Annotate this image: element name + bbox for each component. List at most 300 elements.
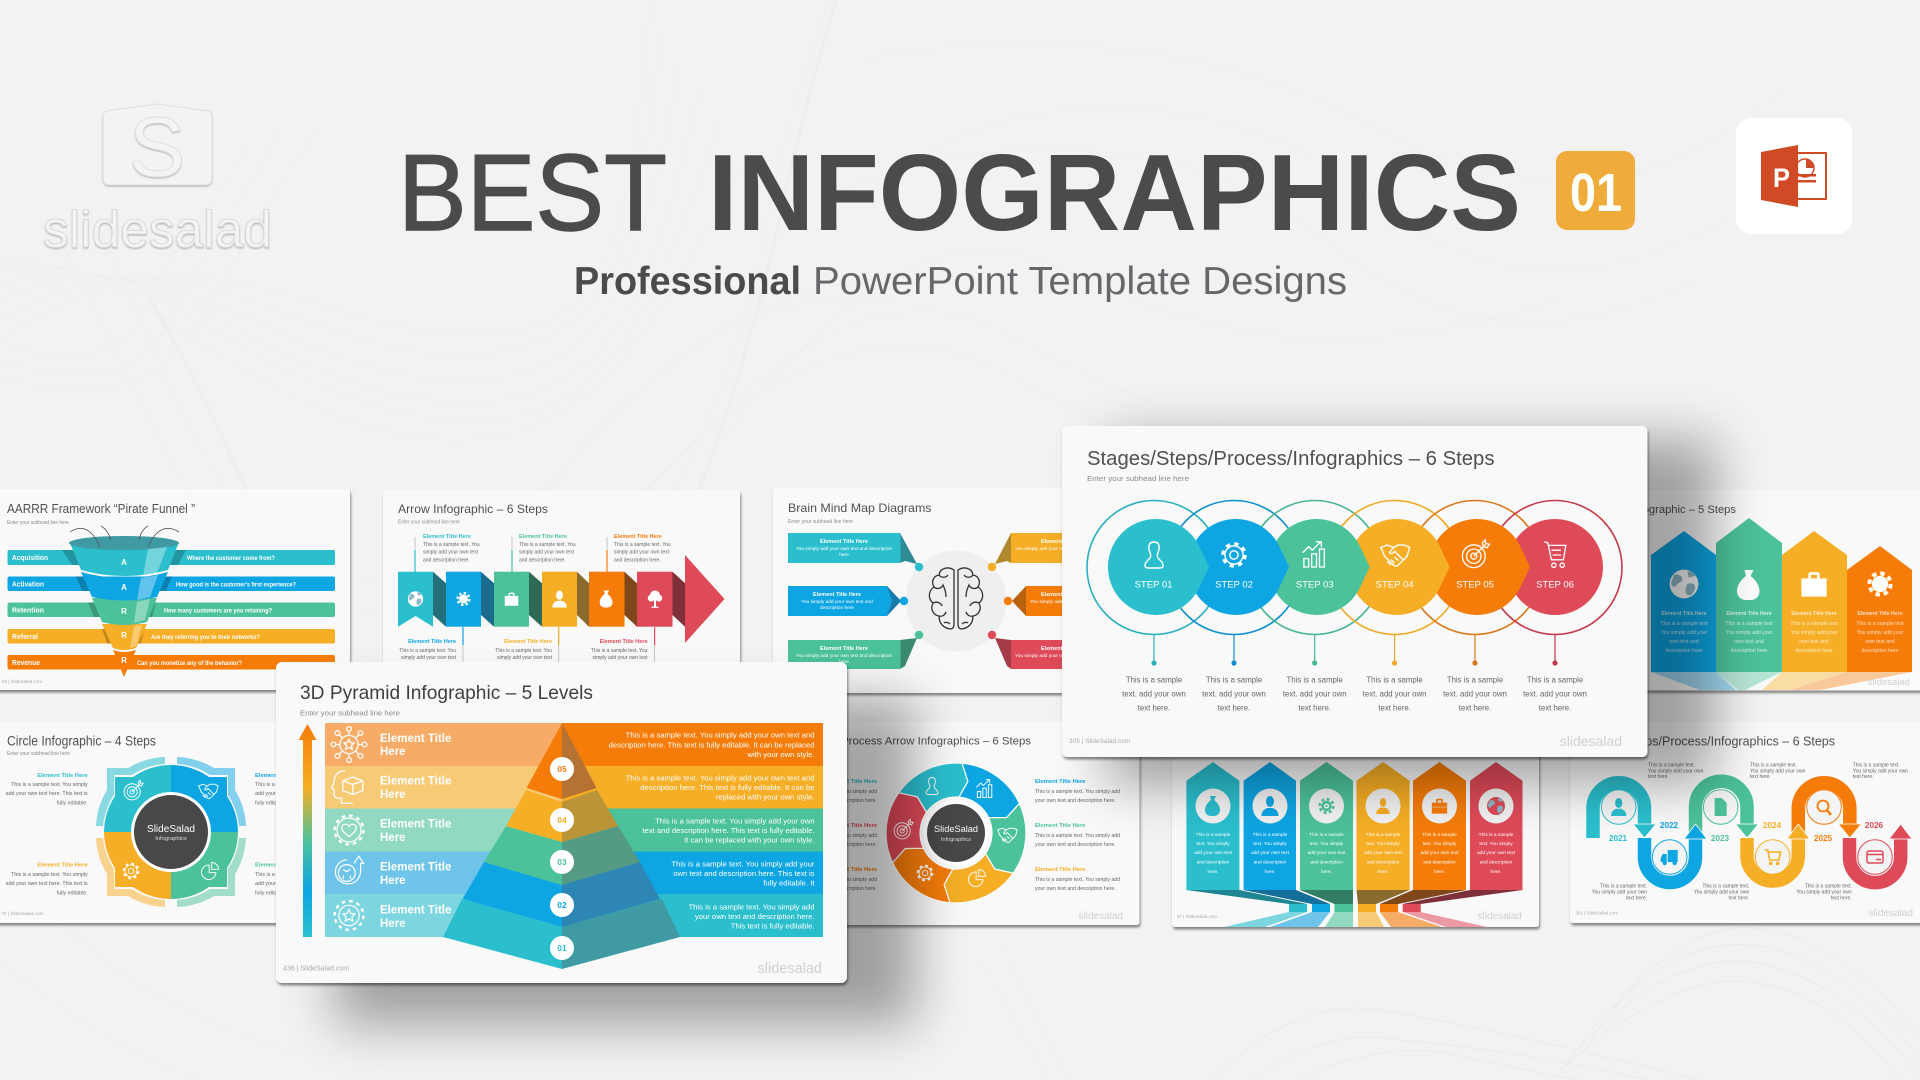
brain boxes: Element Title Here (820, 539, 868, 545)
subtitle: Professional (574, 260, 801, 303)
arrow columns: own text and (1865, 639, 1895, 645)
logo wordmark: slidesalad (43, 201, 272, 259)
timeline rings (1601, 790, 1892, 874)
brain boxes (788, 533, 1089, 669)
panel: banner columns: slidesalad (1478, 911, 1522, 922)
band descriptions: This is a sample text. You simply add (688, 902, 814, 911)
pyramid subhead: Enter your subhead line here (300, 708, 400, 718)
brain boxes: Element Title Here (813, 592, 861, 598)
timeline notes: This is a sample text. (1750, 762, 1797, 768)
brain centre (906, 550, 1006, 652)
panel: process arrow infographics: Process Arrow Infographics – 6 Steps (841, 736, 1031, 748)
stages text: This is a sample (1447, 676, 1503, 684)
stages footer (1069, 733, 1622, 749)
band titles: Here (380, 875, 406, 887)
columns: This is a sample (1196, 832, 1231, 838)
circle labels: This is a sample text. You simply (11, 872, 88, 878)
arrow columns: description here (1666, 648, 1703, 654)
timeline notes: This is a sample text. (1853, 762, 1900, 768)
arrow labels: This is a sample text. You (399, 648, 456, 654)
arrow columns: description here (1796, 648, 1833, 654)
columns: text. You simply (1253, 841, 1287, 847)
arrow columns: You simply add your (1661, 630, 1708, 636)
columns: here. (1265, 869, 1275, 875)
stages text (1122, 676, 1587, 712)
band descriptions: It can be replaced with your own style. (684, 836, 814, 845)
funnel bar text: Referral (12, 634, 38, 641)
columns: This is a sample (1366, 832, 1401, 838)
columns: here. (1491, 869, 1501, 875)
arrow columns: description here (1862, 648, 1899, 654)
donut labels: Element Title Here (827, 867, 878, 873)
columns (1186, 762, 1522, 890)
title: BEST (398, 132, 667, 254)
badge 01 (1556, 151, 1635, 230)
funnel bar text: Can you monetize any of the behavior? (137, 660, 242, 667)
donut labels: You simply add (842, 789, 877, 795)
columns: and description (1254, 860, 1287, 866)
pyramid footer: slidesalad (758, 961, 822, 977)
arrow columns: own text and (1734, 639, 1764, 645)
stages text: This is a sample (1527, 676, 1583, 684)
timeline notes: This is a sample text. (1702, 884, 1749, 890)
badge 01: 01 (1570, 163, 1622, 223)
pyramid footer (283, 961, 822, 977)
timeline notes: This is a sample text. (1600, 884, 1647, 890)
arrow labels: Element Title Here (408, 639, 456, 645)
panel: circle infographic: Enter your subhead line here (7, 751, 70, 757)
stages text: This is a sample (1366, 676, 1423, 684)
columns: here. (1434, 869, 1445, 875)
panel: pirate funnel: Enter your subhead line here (7, 520, 69, 526)
panel: timeline (1570, 722, 1920, 923)
stages labels: STEP 02 (1215, 580, 1253, 590)
circle labels: fully editable. (255, 800, 286, 806)
stages subhead: Enter your subhead line here (1087, 474, 1189, 483)
timeline notes: You simply add your own (1853, 768, 1908, 774)
circle labels: fully editable. (255, 890, 286, 896)
title: INFOGRAPHICS (708, 132, 1521, 254)
timeline notes (1592, 762, 1908, 901)
circle labels: Element Title Here (37, 862, 88, 868)
funnel (69, 526, 179, 677)
donut chart (886, 763, 1026, 903)
columns: add your own text (1477, 850, 1516, 856)
donut labels: You simply add (842, 877, 877, 883)
donut labels (827, 779, 1120, 892)
level badges (550, 757, 574, 960)
funnel bars (8, 550, 335, 670)
panel: arrow infographic 5 steps: slidesalad (1868, 677, 1910, 688)
panel: pirate funnel (0, 489, 350, 690)
circle chart: SlideSalad (147, 824, 195, 835)
donut labels: Element Title Here (1035, 823, 1086, 829)
stages text: text. add your own (1122, 690, 1186, 698)
brain boxes: You simply add your own text (1015, 546, 1078, 552)
circle labels: This is a sample text. You simply (11, 782, 88, 788)
donut labels: Element Title Here (827, 823, 878, 829)
donut labels: description here. (839, 842, 877, 848)
panel: brain mind map: Brain Mind Map Diagrams (788, 501, 932, 515)
columns: This is a sample (1422, 832, 1457, 838)
band titles: Here (380, 789, 406, 801)
band descriptions: your own text and description here. (695, 912, 814, 921)
arrow labels: This is a sample text. You (614, 542, 671, 548)
columns: here. (1208, 869, 1218, 875)
stages text: text here. (1539, 704, 1571, 712)
band descriptions: description here. This text is fully editable. It can be replaced (609, 740, 814, 749)
arrow labels: Element Title Here (614, 534, 662, 540)
brain boxes: You simply add your own text (1015, 653, 1078, 659)
circle labels (6, 773, 306, 896)
funnel bar text: Retention (12, 608, 44, 614)
timeline notes: You simply add your own (1648, 768, 1704, 774)
donut labels: This is a sample text. You simply add (1035, 877, 1120, 883)
stages text: text. add your own (1202, 690, 1266, 698)
panel: stages process (1062, 426, 1648, 757)
columns: text. You simply (1310, 841, 1344, 847)
band descriptions (609, 731, 815, 930)
columns: and description (1423, 860, 1456, 866)
funnel bar text: Activation (12, 582, 44, 588)
brain boxes: Element Title Here (1041, 646, 1089, 652)
stages labels: STEP 01 (1135, 580, 1172, 590)
donut labels: Element Title Here (1035, 867, 1086, 873)
column fan (1186, 890, 1522, 927)
stages text: text. add your own (1443, 690, 1507, 698)
donut labels: You simply add (842, 833, 877, 839)
timeline notes: This is a sample text. (1648, 762, 1695, 768)
stages labels: STEP 05 (1456, 580, 1494, 590)
panel: circle infographic (0, 722, 306, 923)
circle labels: add your own text (255, 791, 297, 797)
circle labels: fully editable. (57, 890, 88, 896)
subtitle: PowerPoint Template Designs (813, 260, 1347, 303)
band titles: Element Title (380, 733, 451, 745)
icon: powerpoint: P (1773, 163, 1790, 193)
funnel bar text: Revenue (12, 660, 40, 667)
band icons (331, 727, 367, 930)
panel: process arrow infographics: slidesalad (1079, 911, 1123, 922)
stages footer: slidesalad (1560, 733, 1622, 749)
circle labels: fully editable. (57, 800, 88, 806)
stages text: text here. (1459, 704, 1491, 712)
timeline years: 2023 (1711, 834, 1730, 843)
band descriptions: fully editable. It (763, 879, 815, 888)
panel: arrow infographic 5 steps: Arrow Infographic – 5 Steps (1598, 504, 1736, 516)
columns: here. (1378, 869, 1388, 875)
arrow labels: and description here. (519, 558, 566, 564)
panel: timeline: Stages/Steps/Process/Infographics – 6 Steps (1584, 734, 1835, 748)
timeline notes: This is a sample text. (1805, 884, 1852, 890)
band titles: Element Title (380, 862, 451, 874)
timeline years: 2022 (1660, 821, 1679, 830)
circle labels: Element Title Here (37, 773, 88, 779)
band descriptions: text and description here. This text is fully editable. (642, 826, 814, 835)
arrow columns: You simply add your (1791, 630, 1838, 636)
timeline notes: You simply add your own (1694, 890, 1750, 896)
brain boxes: description here (820, 605, 854, 611)
brain boxes: here (839, 659, 849, 665)
pyramid footer: 436 | SlideSalad.com (283, 966, 349, 972)
funnel bar text: How good is the customer's first experience? (176, 582, 296, 588)
arrow labels: Element Title Here (519, 534, 567, 540)
funnel bar text: Where the customer come from? (187, 555, 275, 562)
panel: pirate funnel: 03 | SlideSalad.com (2, 679, 42, 684)
band descriptions: own text and description here. This text is (673, 869, 815, 878)
donut centre (894, 778, 1017, 886)
arrow labels: Element Title Here (423, 534, 471, 540)
stages footer: 305 | SlideSalad.com (1069, 738, 1130, 745)
arrow labels: simply add your own text (423, 550, 479, 556)
arrow labels: This is a sample text. You (519, 542, 576, 548)
panel: arrow infographic (383, 490, 740, 690)
panel: timeline: slidesalad (1869, 908, 1913, 919)
timeline notes: text here. (1853, 774, 1874, 780)
band descriptions: This text is fully editable. (731, 922, 814, 930)
donut labels: your own text and description here. (1035, 842, 1116, 848)
panel: circle infographic: Circle Infographic – 4 Steps (7, 734, 156, 748)
panel: 3d pyramid (276, 662, 847, 983)
level badges: 03 (557, 857, 567, 867)
columns: add your own text (1421, 850, 1459, 856)
timeline years: 2021 (1609, 834, 1628, 843)
timeline arrowheads (1633, 824, 1912, 839)
arrow columns (1645, 518, 1920, 690)
panel: banner columns (1172, 720, 1539, 927)
stages title: Stages/Steps/Process/Infographics – 6 Steps (1087, 448, 1494, 470)
arrow labels: simply add your own text (519, 550, 575, 556)
arrow labels: simply add your own text (497, 655, 553, 661)
band descriptions: This is a sample text. You simply add your own (655, 816, 814, 825)
circle chart: Infographics (155, 836, 187, 842)
columns: text. You simply (1479, 841, 1513, 847)
arrow labels: and description here. (423, 558, 470, 564)
arrow columns: This is a sample text (1660, 621, 1708, 627)
arrow columns: own text and (1799, 639, 1829, 645)
timeline notes: You simply add your own (1592, 890, 1647, 896)
columns: add your own text (1251, 850, 1290, 856)
arrow columns: Element Title Here (1661, 611, 1707, 617)
panel: brain mind map: Enter your subhead line here (788, 519, 853, 525)
stages icons (1145, 540, 1566, 568)
columns: text. You simply (1366, 841, 1400, 847)
arrow chain (398, 555, 724, 643)
columns: and description (1367, 860, 1400, 866)
arrow labels: Element Title Here (504, 639, 552, 645)
stages labels: STEP 04 (1376, 580, 1414, 590)
panel: brain mind map (773, 488, 1089, 693)
band titles: Element Title (380, 776, 451, 788)
funnel bar text: Acquisition (12, 555, 48, 562)
brain boxes: here (839, 552, 849, 558)
circle labels: add your own text here. This text is (6, 791, 88, 797)
brain boxes: Element Title Here (820, 646, 868, 652)
stages text: This is a sample (1126, 676, 1182, 684)
stages rings (1087, 500, 1622, 634)
columns: text. You simply (1196, 841, 1230, 847)
band descriptions: This is a sample text. You simply add your own text and (626, 731, 814, 740)
panel: pirate funnel: AARRR Framework “Pirate Funnel ” (7, 502, 195, 516)
band titles: Element Title (380, 818, 451, 830)
funnel: A (121, 558, 127, 567)
arrow columns: Element Title Here (1791, 611, 1837, 617)
columns: add your own text (1364, 850, 1403, 856)
donut labels: your own text and description here. (1035, 798, 1116, 804)
funnel: R (121, 607, 127, 616)
panel: arrow infographic 5 steps (1598, 490, 1920, 690)
level badges: 05 (557, 764, 567, 774)
donut centre: SlideSalad (934, 824, 978, 834)
circle chart (96, 757, 246, 907)
logo shield (103, 104, 212, 185)
band descriptions: This is a sample text. You simply add your (671, 859, 815, 868)
brain boxes: You simply add your own text and description (796, 653, 892, 659)
brain boxes: You simply add your own text and description (796, 546, 892, 552)
band titles: Here (380, 918, 406, 930)
stages text: This is a sample (1287, 676, 1343, 684)
arrow columns: Element Title Here (1857, 611, 1903, 617)
brain boxes: Element Title Here (1041, 592, 1089, 598)
donut labels: This is a sample text. You simply add (1035, 833, 1120, 839)
columns: and description (1197, 860, 1230, 866)
stages text: text here. (1138, 704, 1170, 712)
stages text: This is a sample (1206, 676, 1262, 684)
arrow labels: This is a sample text. You (423, 542, 480, 548)
pyramid title: 3D Pyramid Infographic – 5 Levels (300, 682, 593, 704)
funnel: R (121, 631, 127, 640)
arrow labels: simply add your own text (401, 655, 457, 661)
circle labels: Element Title Here (255, 773, 306, 779)
stages stems (1151, 634, 1558, 666)
columns: and description (1310, 860, 1343, 866)
funnel bar text (12, 555, 296, 667)
columns: and description (1480, 860, 1513, 866)
pyramid shape (443, 723, 680, 969)
arrow labels (399, 534, 671, 662)
logo letter S: S (129, 100, 185, 194)
columns: This is a sample (1253, 832, 1288, 838)
timeline notes: text here. (1728, 895, 1749, 901)
stages text: text here. (1218, 704, 1250, 712)
band descriptions: replaced with your own style. (716, 793, 814, 802)
circle labels: This is a sample text. (255, 782, 305, 788)
level badges: 04 (557, 815, 567, 825)
band descriptions: This is a sample text. You simply add your own text and (626, 773, 814, 782)
arrow columns: This is a sample text (1790, 621, 1838, 627)
stages text: text here. (1298, 704, 1331, 712)
circle labels: Element Title Here (255, 862, 306, 868)
band descriptions: description here. This text is fully editable. It can be (640, 783, 814, 792)
circle labels: add your own text here. This text is (6, 881, 88, 887)
arrow labels: simply add your own text (592, 655, 648, 661)
columns: text. You simply (1423, 841, 1457, 847)
stages text: text. add your own (1363, 690, 1426, 698)
funnel bar text: Are they referring you to their networks? (151, 634, 260, 641)
arrow columns: You simply add your (1726, 630, 1773, 636)
funnel: A (121, 583, 127, 592)
funnel bar text: How many customers are you retaining? (164, 608, 272, 614)
stage shadow (1105, 440, 1715, 785)
stages labels: STEP 03 (1296, 580, 1334, 590)
subtitle (574, 260, 1347, 303)
icon: powerpoint (1736, 118, 1852, 234)
arrow columns: Element Title Here (1726, 611, 1772, 617)
timeline snake (1593, 781, 1901, 883)
panel: timeline: 301 | SlideSalad.com (1576, 910, 1618, 916)
circle labels: This is a sample text. (255, 872, 305, 878)
panel: arrow infographic: Enter your subhead line here (398, 520, 460, 526)
timeline notes: You simply add your own (1796, 890, 1852, 896)
stages labels (1135, 580, 1574, 590)
brain boxes: Element Title Here (1041, 539, 1089, 545)
panel: circle infographic: 75 | SlideSalad.com (1, 911, 44, 917)
arrow columns: You simply add your (1857, 630, 1904, 636)
logo: slidesalad emboss (43, 100, 272, 259)
funnel: R (121, 656, 127, 665)
arrow columns: own text and (1669, 639, 1699, 645)
donut labels: your own text and description here. (1035, 886, 1116, 892)
level badges: 01 (557, 943, 567, 953)
columns: here. (1321, 869, 1332, 875)
arrow labels: This is a sample text. You (495, 648, 552, 654)
arrow labels: and description here. (614, 558, 661, 564)
band titles (380, 733, 451, 930)
band titles: Element Title (380, 904, 451, 916)
stages discs (1108, 519, 1603, 615)
donut labels: Element Title Here (1035, 779, 1086, 785)
timeline years (1609, 821, 1884, 843)
columns: This is a sample (1479, 832, 1514, 838)
arrow columns: description here (1731, 648, 1768, 654)
brain boxes: You simply add (1030, 599, 1063, 605)
arrow columns: This is a sample text (1725, 621, 1773, 627)
timeline notes: text here. (1750, 774, 1771, 780)
arrow labels: This is a sample text. You (591, 648, 648, 654)
panel: arrow infographic: Arrow Infographic – 6 Steps (398, 502, 548, 516)
panel: process arrow infographics (800, 722, 1140, 925)
growth arrow (298, 724, 316, 937)
stages text: text. add your own (1283, 690, 1347, 698)
timeline years: 2026 (1865, 821, 1884, 830)
timeline years: 2025 (1814, 834, 1833, 843)
band titles: Here (380, 832, 406, 844)
donut centre: Infographics (941, 837, 971, 843)
donut labels: description here. (839, 886, 877, 892)
donut labels: Element Title Here (827, 779, 878, 785)
timeline notes: text here. (1648, 774, 1669, 780)
stages text: text here. (1378, 704, 1411, 712)
columns: add your own text (1194, 850, 1233, 856)
timeline notes: text here. (1626, 895, 1647, 901)
pyramid bands (325, 723, 823, 937)
band titles: Here (380, 746, 406, 758)
columns: add your own text (1308, 850, 1346, 856)
timeline years: 2024 (1763, 821, 1782, 830)
level badges: 02 (557, 900, 567, 910)
timeline notes: text here. (1831, 895, 1852, 901)
pyramid shadow (335, 700, 915, 1025)
circle labels: add your own text (255, 881, 297, 887)
timeline notes: You simply add your own (1750, 768, 1806, 774)
donut labels: This is a sample text. You simply add (1035, 789, 1120, 795)
panel: banner columns: 37 | SlideSalad.com (1177, 914, 1217, 919)
brain boxes: You simply add your own text and (801, 599, 873, 605)
columns: This is a sample (1309, 832, 1344, 838)
arrow columns: This is a sample text (1856, 621, 1904, 627)
stages text: text. add your own (1523, 690, 1587, 698)
stages labels: STEP 06 (1536, 580, 1574, 590)
